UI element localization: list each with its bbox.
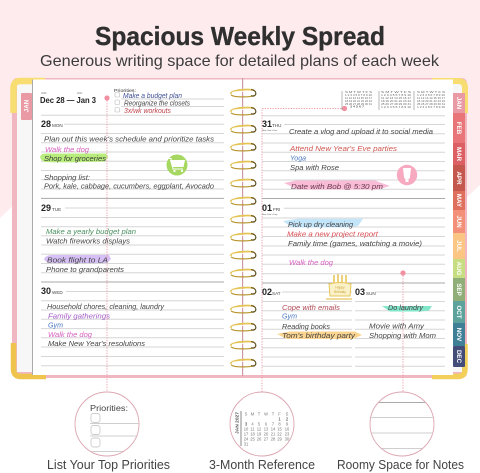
left JAN tab: JAN — [24, 99, 30, 112]
right page: 31 Thursday: Attend New Year's Eve parties — [289, 144, 397, 153]
right page: 01 Friday: Walk the dog — [289, 258, 334, 267]
week date heading: 2026 — [41, 92, 47, 95]
detail circle: calendar: W — [264, 412, 268, 416]
right page: 03 Sunday: Do laundry — [388, 303, 424, 312]
left page: 28 Monday: Shop for groceries — [44, 154, 106, 163]
mini calendars: 11 12 13 14 15 16 17 — [381, 97, 412, 100]
mini calendars: 1 2 3 4 5 6 7 8 9 10 — [417, 94, 446, 97]
month tabs: OCT — [455, 305, 462, 319]
month tabs: JAN — [455, 97, 462, 110]
month tabs: JUL — [455, 240, 462, 252]
detail circle: calendar: S — [245, 412, 248, 416]
detail circle: calendar: 23 — [285, 432, 290, 436]
dotted callout line: notes — [402, 273, 404, 392]
right page: 31 Thursday: Spa with Rose — [290, 163, 339, 172]
right page: 01 Friday: Family time (games, watching a movie) — [288, 239, 422, 248]
yellow corner: bottom right — [432, 344, 465, 376]
right page: 31 Thursday — [262, 119, 433, 191]
right page: 02 Saturday: 02 — [262, 287, 272, 297]
left page: 28 Monday: 28 — [41, 119, 51, 129]
detail circle: calendar: 10 — [244, 426, 249, 432]
left page: 30 Wednesday: Family gatherings — [48, 312, 110, 320]
month tabs: AUG — [455, 262, 462, 276]
detail circle: calendar: 11 — [250, 426, 255, 432]
left page: 28 Monday: Plan out this week's schedule and prioritize tasks — [44, 134, 214, 144]
detail circle: calendar: 28 — [271, 436, 276, 442]
mini calendars: 3 4 5 6 7 — [350, 106, 365, 108]
mini calendars: 1 2 3 4 5 6 7 8 9 10 — [381, 94, 412, 97]
right page: 31 Thursday: New Year's Eve — [262, 129, 278, 132]
left page: 30 Wednesday — [41, 286, 165, 348]
highlights — [40, 154, 432, 339]
right page: 31 Thursday: Yoga — [290, 154, 306, 162]
icon: birthday cake: Birthday — [334, 290, 346, 294]
mini calendars: 11 12 13 14 15 16 17 — [417, 97, 446, 100]
mini calendars: 1 2 3 4 5 6 7 8 9 10 — [345, 94, 373, 97]
left page: 29 Tuesday — [41, 203, 136, 274]
left page: 28 Monday: Shopping list: — [44, 173, 90, 182]
yellow corner: top right — [432, 81, 465, 113]
priorities list: Reorganize the closets — [124, 98, 190, 108]
back pages strip right — [452, 84, 462, 372]
left page: 28 Monday: MON — [52, 123, 63, 128]
right page: 03 Sunday — [355, 287, 436, 340]
right page: 01 Friday: Make a new project report — [287, 230, 379, 238]
priorities list: Priorities: — [114, 88, 136, 94]
month tabs: DEC — [455, 350, 462, 364]
detail circle: calendar: 17 — [244, 432, 249, 436]
detail circle: calendar: 21 — [271, 432, 276, 436]
detail circle: calendar: 5 — [258, 422, 261, 426]
month tabs: NOV — [455, 328, 462, 342]
detail circle: calendar: 24 — [244, 436, 249, 442]
callout dot: priorities — [104, 95, 110, 101]
dotted callout line: calendar — [262, 108, 344, 392]
left page: 28 Monday — [41, 119, 214, 190]
detail circle: calendar: JAN 2027 — [234, 411, 240, 434]
left page: 30 Wednesday: WED — [52, 290, 63, 295]
priorities list: 3x/wk workouts — [124, 106, 171, 115]
priorities list — [114, 88, 224, 115]
caption: calendar: 3-Month Reference — [209, 458, 315, 472]
left page: 29 Tuesday: TUE — [52, 207, 61, 212]
right page: 01 Friday: 01 — [262, 203, 272, 213]
icon: shopping cart — [166, 154, 188, 176]
right page: 03 Sunday: SUN — [366, 291, 376, 296]
detail circle: calendar: 12 — [257, 426, 262, 432]
left page: 28 Monday: Pork, kale, cabbage, cucumbers, eggplant, Avocado — [44, 182, 214, 190]
detail circle: calendar: S — [286, 412, 289, 416]
detail circle: calendar: 1 — [278, 416, 281, 422]
right page: 01 Friday: FRI — [273, 207, 280, 212]
detail circle: calendar: M — [251, 412, 255, 416]
right page: 02 Saturday — [262, 287, 356, 340]
month tabs: JUN — [455, 215, 462, 228]
detail circle: calendar: 16 — [285, 426, 290, 432]
left page: 30 Wednesday: 30 — [41, 286, 51, 296]
mini calendars: S M T W T F S — [381, 91, 412, 94]
right page: 31 Thursday: Create a vlog and upload it to social media — [289, 127, 433, 136]
detail circle: calendar: 3 — [245, 422, 248, 426]
week date heading: 2027 — [77, 92, 83, 95]
detail circle: calendar: 13 — [264, 426, 269, 432]
detail circle: calendar: 7 — [272, 422, 275, 426]
detail circle: calendar: 15 — [277, 426, 282, 432]
left page: 30 Wednesday: Walk the dog — [48, 330, 93, 339]
right page: 03 Sunday: 03 — [355, 287, 365, 297]
planner cover — [12, 78, 467, 378]
right page: 01 Friday: New Year's Day — [262, 213, 278, 216]
mini calendars: 18 19 20 21 22 23 24 — [417, 100, 446, 103]
title: Spacious Weekly Spread — [95, 21, 385, 51]
detail circle: priorities — [75, 392, 140, 456]
dotted callout line: priorities — [106, 98, 108, 392]
mini calendars: 1 2 3 4 5 6 7 8 9 10 — [381, 106, 412, 109]
right page: 02 Saturday: Cope with emails — [282, 303, 340, 312]
mini calendars: 25 26 27 28 29 30 31 — [381, 103, 412, 106]
month tabs: APR — [455, 171, 462, 185]
detail circle: calendar: 30 — [285, 436, 290, 442]
planner: open notebook — [12, 78, 467, 392]
caption: notes: Roomy Space for Notes — [337, 458, 464, 472]
mini calendars: 18 19 20 21 22 23 24 — [345, 100, 373, 103]
back pages strip — [17, 84, 33, 372]
mini calendars: 18 19 20 21 22 23 24 — [381, 100, 412, 103]
left page: 30 Wednesday: Gym — [48, 320, 63, 330]
spiral rings — [230, 90, 256, 367]
mini calendars: 11 12 13 14 15 16 17 — [345, 97, 373, 100]
mini calendars: S M T W T F S — [345, 91, 373, 94]
right page: 03 Sunday: Movie with Amy — [369, 322, 425, 330]
right page: 31 Thursday: THU — [272, 123, 281, 128]
detail circle: calendar: 29 — [277, 436, 282, 442]
left page: 28 Monday: Walk the dog — [45, 145, 90, 154]
left page: 29 Tuesday: Make a yearly budget plan — [46, 227, 136, 236]
priorities list: Make a budget plan — [123, 91, 182, 100]
mini calendars — [342, 91, 446, 110]
subtitle: Generous writing space for detailed plans of each week — [40, 53, 440, 70]
detail circle: calendar: 20 — [264, 432, 269, 436]
detail circle: calendar: 8 — [278, 422, 281, 426]
left page: 30 Wednesday: Make New Year's resolutions — [48, 339, 145, 348]
detail circle: calendar: 26 — [257, 436, 262, 442]
left page: 29 Tuesday: Book flight to LA — [47, 256, 108, 264]
month tabs: MAR — [455, 147, 462, 162]
detail circle: calendar: 4 — [251, 422, 254, 426]
detail circle: calendar: 25 — [250, 436, 255, 442]
mini calendars: S M T W T F S — [417, 91, 446, 94]
right page: 01 Friday — [262, 203, 422, 267]
detail circle: calendar: 27 — [264, 436, 269, 442]
month tabs: FEB — [455, 122, 462, 135]
right page: 02 Saturday: Reading books — [282, 322, 330, 331]
left page: 29 Tuesday: 29 — [41, 203, 51, 213]
left page: 30 Wednesday: Household chores, cleaning, laundry — [47, 302, 165, 311]
caption: priorities: List Your Top Priorities — [47, 458, 170, 472]
left page — [32, 80, 243, 375]
detail circle: calendar: 19 — [257, 432, 262, 436]
right page: 02 Saturday: Gym — [282, 312, 297, 320]
left page: 29 Tuesday: Phone to grandparents — [46, 265, 124, 274]
month tabs: SEP — [455, 283, 462, 296]
detail circle: calendar: 31 — [244, 442, 249, 446]
detail circle: calendar: 18 — [250, 432, 255, 436]
right page: 31 Thursday: 31 — [262, 119, 272, 129]
right page: 31 Thursday: Date with Bob @ 5:30 pm — [291, 182, 383, 191]
left page ruled lines — [41, 115, 224, 366]
detail circle: notes — [370, 392, 434, 456]
month tabs — [453, 93, 465, 367]
mini calendars: 25 26 27 28 29 30 31 — [345, 103, 373, 106]
callout dot: calendar — [342, 106, 347, 111]
icon: birthday cake — [326, 274, 352, 299]
detail circle: calendar: 2 — [286, 416, 289, 422]
detail circle: calendar — [230, 392, 294, 456]
mini calendars: 1 2 3 4 5 6 7 8 9 10 — [417, 106, 446, 109]
month tabs: MAY — [455, 194, 462, 208]
detail circle: calendar: T — [258, 412, 261, 416]
detail circle: calendar: F — [278, 412, 281, 416]
yellow corner: bottom left — [14, 343, 46, 376]
left JAN tab — [21, 93, 32, 120]
right page ruled lines — [262, 116, 445, 366]
detail circle: calendar: 14 — [271, 426, 276, 432]
yellow corner: top left — [14, 81, 45, 113]
right page: 01 Friday: Pick up dry cleaning — [288, 220, 354, 229]
right page: 03 Sunday: Shopping with Mom — [369, 331, 436, 340]
detail circle: priorities: Priorities: — [90, 403, 128, 413]
detail circle: calendar: 6 — [265, 422, 268, 426]
detail circle: calendar: T — [272, 412, 275, 416]
detail circle: calendar: 22 — [277, 432, 282, 436]
callout dot: notes — [400, 270, 406, 276]
icon: cocktail glass — [397, 165, 417, 185]
icon: birthday cake: Happy — [335, 286, 345, 290]
right page: 02 Saturday: SAT — [272, 291, 281, 296]
left page: 29 Tuesday: Watch fireworks displays — [46, 236, 130, 246]
week date heading: Dec 28 — Jan 3 — [40, 95, 96, 105]
detail circle: calendar: 9 — [286, 422, 289, 426]
right page — [243, 80, 453, 375]
mini calendars: 25 26 27 28 29 30 31 — [417, 103, 446, 106]
right page: 02 Saturday: Tom's birthday party — [282, 331, 356, 340]
